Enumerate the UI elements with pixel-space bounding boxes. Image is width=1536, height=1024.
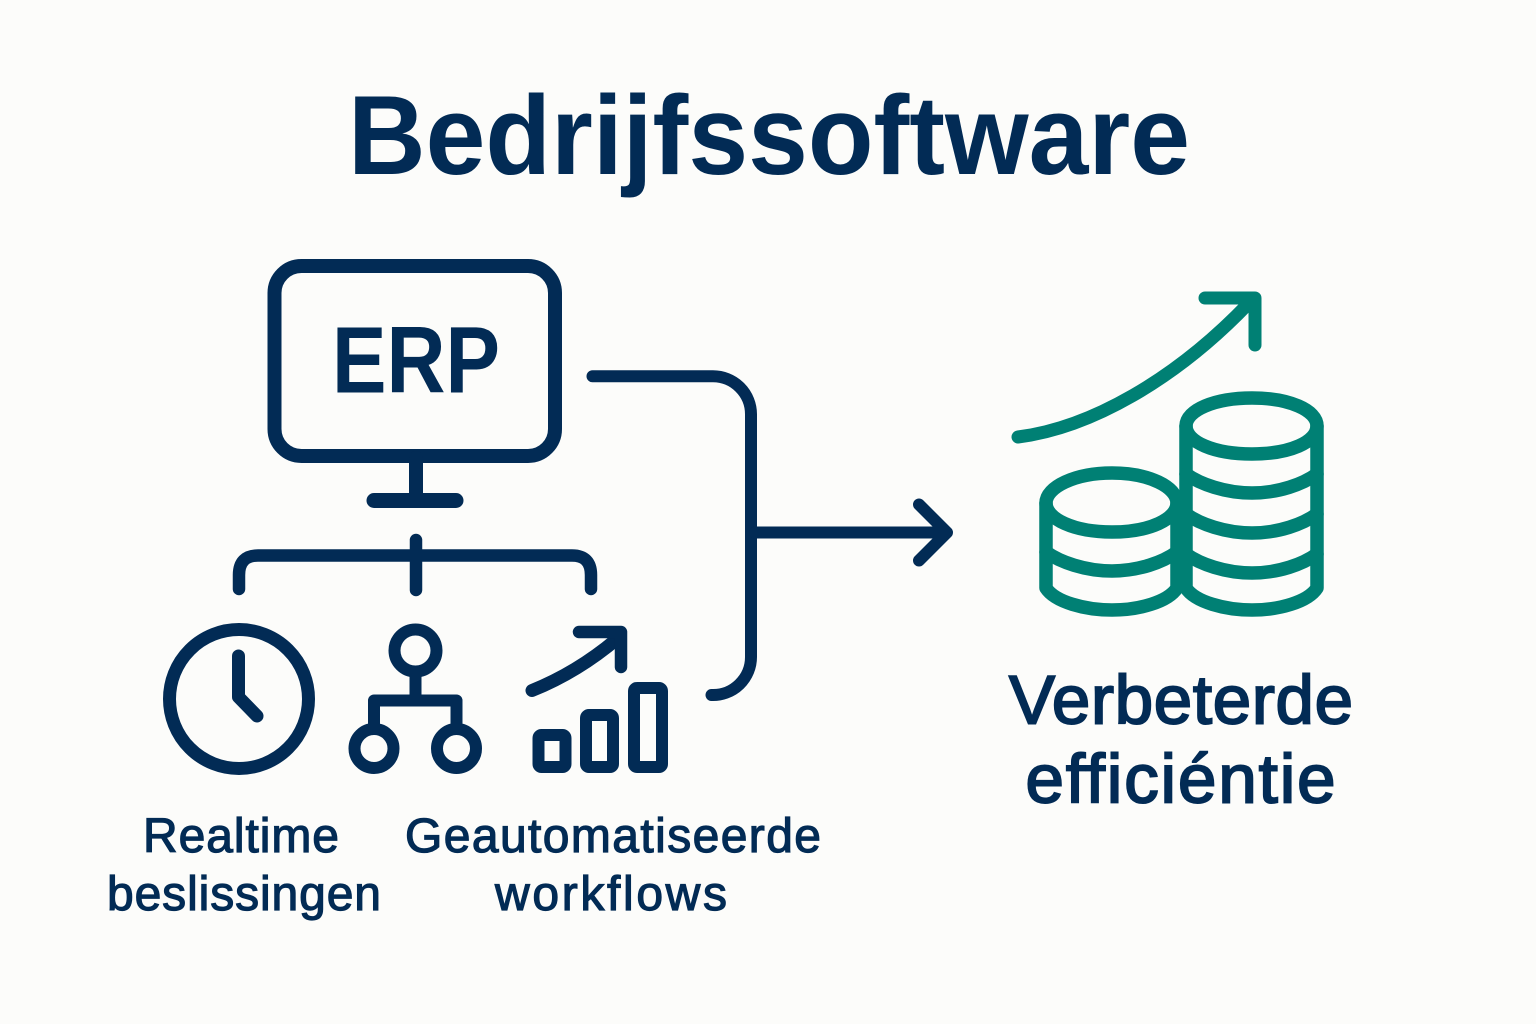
- label: automated workflows: Geautomatiseerde: [405, 810, 821, 863]
- icon: bar chart with arrow: [532, 632, 662, 767]
- icon: clock: [170, 630, 308, 768]
- label: realtime decisions: beslissingen: [107, 868, 381, 921]
- process connector arrow: [592, 376, 947, 695]
- branch connector: [239, 540, 591, 590]
- label: automated workflows: [405, 810, 821, 921]
- label: improved efficiency: [1009, 662, 1353, 818]
- label: realtime decisions: [107, 810, 381, 921]
- label: improved efficiency: Verbeterde: [1009, 662, 1353, 738]
- label: automated workflows: workflows: [494, 868, 727, 921]
- label: improved efficiency: efficiéntie: [1026, 741, 1336, 818]
- icon: coin stacks: [1046, 398, 1317, 610]
- ERP label: ERP: [332, 308, 500, 414]
- label: realtime decisions: Realtime: [143, 810, 339, 863]
- icon: growth arrow: [1018, 298, 1255, 437]
- title: Bedrijfssoftware: [348, 73, 1190, 198]
- icon: ERP monitor: [274, 266, 555, 500]
- icon: hierarchy: [354, 630, 476, 768]
